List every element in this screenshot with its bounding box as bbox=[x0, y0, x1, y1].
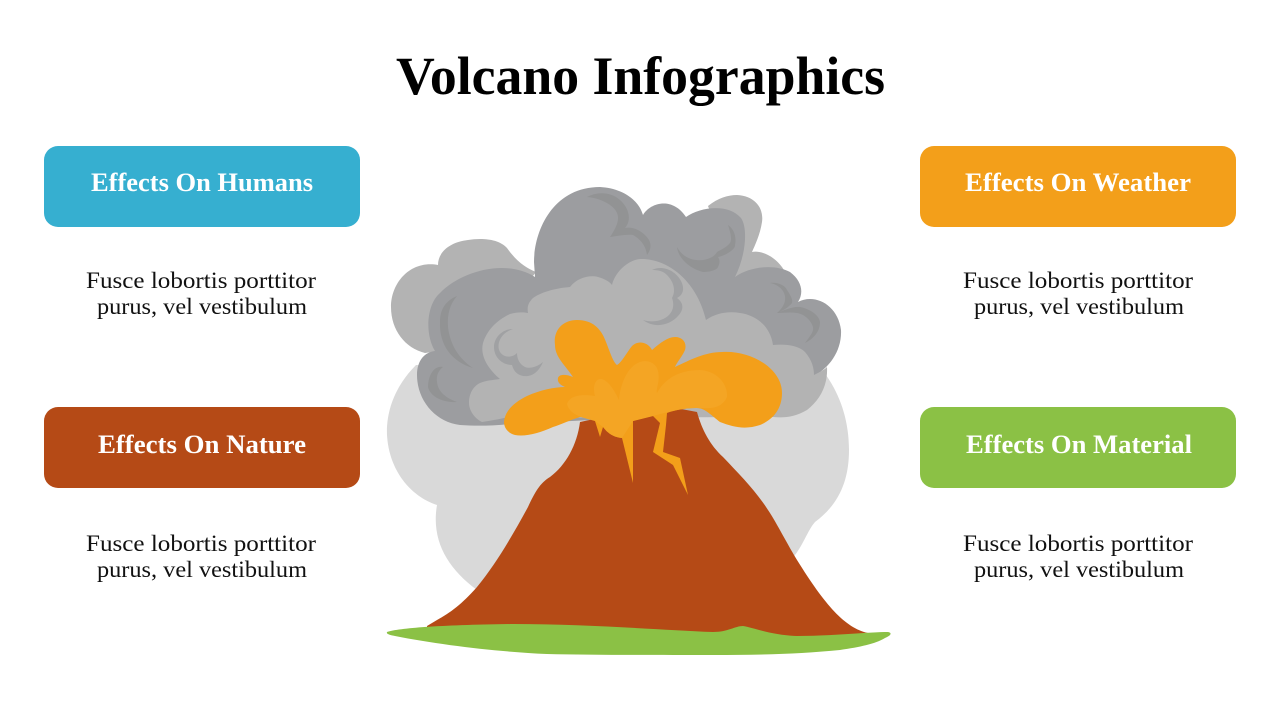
text block: humans bbox=[86, 268, 316, 320]
text block: material bbox=[963, 531, 1193, 583]
swirls on dark smoke bbox=[428, 193, 820, 402]
heading box: nature bbox=[44, 407, 360, 488]
panel: effects on weather bbox=[920, 146, 1236, 320]
title: Volcano Infographics bbox=[396, 46, 885, 106]
text block: weather: purus, vel vestibulum bbox=[974, 294, 1184, 320]
illustration: erupting volcano bbox=[387, 187, 891, 655]
text block: humans: Fusce lobortis porttitor bbox=[86, 268, 316, 294]
swirls on light smoke bbox=[494, 268, 683, 376]
grass ground bbox=[387, 624, 891, 655]
heading box: material bbox=[920, 407, 1236, 488]
text block: material: Fusce lobortis porttitor bbox=[963, 531, 1193, 557]
text block: weather bbox=[963, 268, 1193, 320]
text block: humans: purus, vel vestibulum bbox=[97, 294, 307, 320]
heading: weather: Effects On Weather bbox=[965, 168, 1191, 197]
dark smoke mass bbox=[417, 187, 841, 426]
text block: weather: Fusce lobortis porttitor bbox=[963, 268, 1193, 294]
lighter lava highlight bbox=[567, 361, 727, 438]
text block: nature bbox=[86, 531, 316, 583]
heading: humans: Effects On Humans bbox=[91, 168, 313, 197]
heading: material: Effects On Material bbox=[966, 430, 1192, 459]
text block: nature: Fusce lobortis porttitor bbox=[86, 531, 316, 557]
mid grey smoke, right bbox=[708, 195, 784, 290]
back pale smoke bbox=[387, 365, 849, 590]
panel: effects on humans bbox=[44, 146, 360, 320]
panel: effects on material bbox=[920, 407, 1236, 583]
heading: nature: Effects On Nature bbox=[98, 430, 306, 459]
heading box: humans bbox=[44, 146, 360, 227]
text block: nature: purus, vel vestibulum bbox=[97, 557, 307, 583]
mid grey smoke, left bbox=[391, 239, 536, 353]
volcano cone bbox=[427, 405, 868, 640]
lava splash bbox=[504, 320, 782, 495]
front light smoke bbox=[469, 259, 827, 422]
panel: effects on nature bbox=[44, 407, 360, 583]
text block: material: purus, vel vestibulum bbox=[974, 557, 1184, 583]
heading box: weather bbox=[920, 146, 1236, 227]
